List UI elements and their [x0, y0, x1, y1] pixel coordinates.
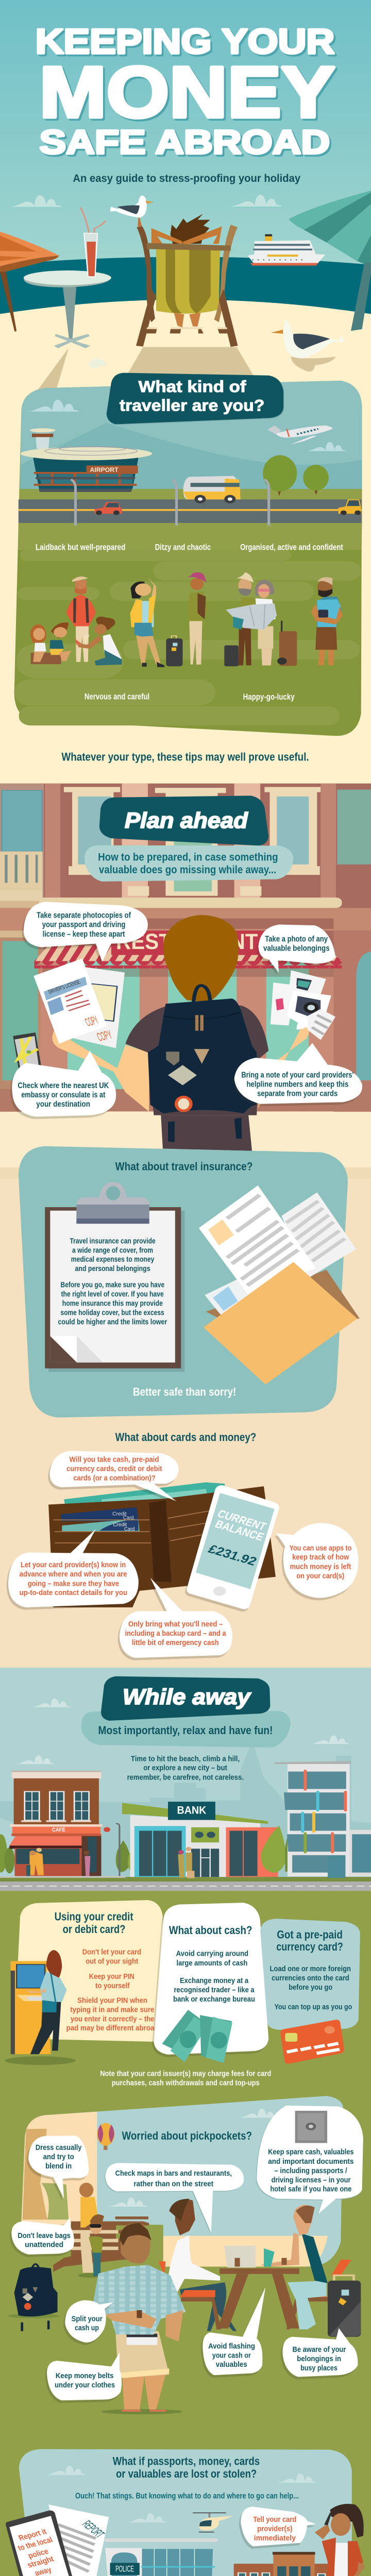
subheading bubble: Most importantly, relax and have fun! — [98, 1724, 273, 1737]
icon: driving licence copies: COPY — [83, 1013, 101, 1029]
panel: cash: Exchange money at a — [180, 1976, 248, 1985]
icon: banknotes — [162, 2010, 232, 2063]
icon: clouds — [47, 2466, 317, 2522]
scene: men at table — [159, 2199, 351, 2331]
callout: belongings: busy places — [300, 2364, 338, 2372]
icon: phone report: straight — [26, 2554, 55, 2569]
icon: phone balance: CURRENT — [215, 1507, 268, 1533]
subheading bubble: plan ahead: How to be prepared, in case something — [98, 851, 278, 863]
icon: driving licence copies: COPY — [95, 1028, 114, 1044]
callout: flashing cash: valuables — [216, 2360, 247, 2369]
heading: plan ahead: Plan ahead — [125, 808, 248, 833]
callout: card provider — [241, 2506, 316, 2546]
icon: wallet: Card — [123, 1515, 133, 1521]
title — [36, 22, 335, 161]
icon: red car — [95, 502, 122, 515]
section: traveller types — [14, 320, 362, 736]
icon: driving licence copies — [33, 958, 125, 1048]
figure: woman with sunglasses — [130, 578, 164, 667]
icon: report paper — [48, 2504, 109, 2576]
section: pickpocket callouts — [11, 2217, 358, 2400]
icon: teal parasol — [289, 191, 371, 331]
callout: only bring what you need: including a backup card – and a — [125, 1629, 226, 1637]
heading: pickpockets: Worried about pickpockets? — [122, 2129, 252, 2142]
section: hero beach scene — [0, 22, 371, 348]
clipboard text: could be higher and the limits lower — [58, 1317, 167, 1326]
icon: ATM and woman — [5, 1950, 76, 2065]
heading: plan ahead — [99, 795, 268, 845]
icon: police building: POLICE — [115, 2564, 134, 2574]
callout: cash or cards: cards (or a combination)? — [73, 1473, 156, 1482]
callout: check maps: rather than on the street — [133, 2179, 213, 2188]
panel: cash: What about cash? — [169, 1924, 252, 1937]
clipboard — [45, 1182, 184, 1372]
text: time to hit the beach: Time to hit the beach, climb a hill, — [131, 1754, 240, 1763]
icon: airport: AIRPORT — [90, 467, 119, 473]
icon: orange card — [280, 2020, 344, 2064]
icon: suitcase — [328, 2275, 361, 2337]
callout: dress casually: Dress casually — [36, 2143, 82, 2151]
heading: what kind of traveller: What kind of — [139, 378, 246, 396]
text: time to hit the beach: remember, be carefree, not careless. — [127, 1773, 244, 1782]
icon: wallet: Card — [124, 1526, 134, 1532]
clipboard text: the right level of cover. If you have — [61, 1290, 164, 1298]
section: while away — [0, 1676, 371, 1891]
panel: cash: bank or exchange bureau — [173, 1995, 255, 2003]
subheading bubble: plan ahead — [85, 845, 293, 882]
traveller type labels: Ditzy and chaotic — [155, 543, 211, 552]
lighter grass bands — [14, 550, 361, 725]
icon: helicopter — [193, 2513, 233, 2532]
icon: shell — [89, 359, 107, 369]
panel: credit or debit card: Don't let your card — [82, 1947, 141, 1956]
figure: woman with pink hat — [187, 572, 208, 665]
figure: traveller from behind — [53, 915, 310, 1151]
text: better safe: Better safe than sorry! — [133, 1385, 236, 1398]
callout: photocopies: your passport and driving — [42, 920, 125, 929]
panel: traveller — [14, 381, 362, 736]
callout: tell provider: Let your card provider(s) know in — [21, 1561, 126, 1569]
panel: insurance — [19, 1146, 348, 1417]
clipboard text — [58, 1236, 167, 1326]
callout: tell provider: going – make sure they have — [28, 1579, 119, 1588]
callout: embassy — [12, 1051, 116, 1116]
icon: driving licence copies: DRIVER'S LICENSE — [47, 978, 81, 995]
heading: while away — [101, 1676, 270, 1721]
figure: couple with map — [224, 572, 297, 666]
callout: money belts: Keep money belts — [56, 2371, 114, 2380]
section: travel insurance — [19, 1146, 360, 1417]
subheading bubble: plan ahead: valuable does go missing while away... — [99, 863, 276, 876]
icon: clouds — [11, 195, 282, 207]
callout: cash or cards: currency cards, credit or debit — [66, 1464, 162, 1473]
heading: insurance: What about travel insurance? — [115, 1160, 252, 1173]
clipboard text: some holiday cover, but the excess — [61, 1308, 164, 1317]
icon: black suitcase — [166, 636, 182, 666]
callout: hotel safe — [257, 2106, 363, 2214]
panel: credit or debit card: typing it in and make sure — [70, 2005, 154, 2014]
section: plan ahead — [0, 784, 371, 1151]
panel: credit or debit card: to yourself — [95, 1981, 130, 1990]
panel: pre-paid card — [260, 1919, 360, 2030]
icon: phone report: to the local — [16, 2535, 54, 2552]
icon: table with cocktail — [24, 207, 111, 348]
chair shadow gaps — [154, 322, 223, 343]
section: while away tips — [5, 1900, 363, 2414]
text: fees note: purchases, cash withdrawals and card top-ups — [112, 2078, 260, 2087]
sea — [0, 257, 371, 314]
icon: clouds — [28, 400, 346, 451]
icon: office tower — [275, 1761, 371, 1878]
clipboard text: medical expenses to money — [71, 1255, 154, 1264]
callout: split cash: cash up — [75, 2324, 99, 2332]
callout: dress casually: and try to — [43, 2153, 74, 2161]
subheading bubble — [81, 1711, 291, 1748]
callout: split cash: Split your — [72, 2314, 103, 2323]
figure: family — [30, 577, 122, 666]
building facade — [0, 784, 371, 1112]
panel: cash — [154, 1903, 268, 2055]
callout: money belts — [47, 2352, 122, 2400]
callout: helplines — [234, 1043, 362, 1104]
panel: pre-paid card: before you go — [289, 1983, 332, 1991]
icon: clouds — [109, 2109, 278, 2207]
callout: card provider: immediately — [254, 2534, 296, 2543]
callout: take a photo — [258, 924, 335, 972]
panel: cash: Avoid carrying around — [176, 1949, 248, 1958]
icon: man on deckchair — [136, 214, 238, 347]
callout: check maps: Check maps in bars and restaurants, — [115, 2168, 232, 2177]
panel: credit or debit card: Using your credit — [55, 1910, 133, 1923]
callout: money belts: under your clothes — [55, 2380, 115, 2389]
icon: wallet: Credit — [112, 1511, 127, 1517]
icon: phone map — [13, 1032, 43, 1078]
panel: credit or debit card: pad may be different abroad — [66, 2024, 159, 2032]
heading: cards and money: What about cards and money? — [115, 1431, 256, 1444]
icon: cafe building: CAFE — [52, 1826, 65, 1833]
icon: police building — [104, 2538, 218, 2576]
figure: man with money belt — [93, 2223, 185, 2414]
trees left — [0, 1834, 145, 1873]
heading: lost or stolen: What if passports, money, cards — [113, 2454, 260, 2468]
section: traveller figures — [30, 543, 343, 763]
icon: phone balance — [187, 1485, 279, 1609]
callout: flashing cash: your cash or — [212, 2351, 251, 2360]
ground and road — [0, 1876, 371, 1891]
traveller type labels: Laidback but well-prepared — [36, 543, 125, 552]
icon: report paper: REPORT — [79, 2518, 107, 2539]
callout: photocopies — [24, 902, 148, 962]
callout: bags: unattended — [25, 2240, 63, 2249]
callout: photocopies: license – keep these apart — [43, 929, 125, 939]
icon: airport — [21, 428, 152, 492]
text: time to hit the beach: or explore a new city – but — [143, 1764, 227, 1772]
heading: lost or stolen — [113, 2454, 260, 2480]
callout: only bring what you need: little bit of emergency cash — [132, 1638, 219, 1647]
text: time to hit the beach — [127, 1754, 244, 1782]
icon: clouds — [16, 1699, 350, 1764]
callout: tell provider: advance where and when you are — [20, 1570, 127, 1578]
icon: phone balance: £231.92 — [206, 1542, 259, 1568]
callout: bags: Don't leave bags — [18, 2231, 71, 2240]
callout: embassy: embassy or consulate is at — [21, 1090, 105, 1099]
restaurant sign and awning: RESTAURANT — [116, 929, 258, 954]
title: SAFE ABROAD — [40, 124, 330, 161]
heading: while away: While away — [123, 1684, 252, 1709]
panel: credit or debit card: Shield your PIN when — [77, 1996, 147, 2005]
figures at cafe — [26, 1848, 90, 1876]
text: fees note: Note that your card issuer(s) may charge fees for card — [100, 2069, 271, 2078]
icon: embassy — [225, 2552, 329, 2576]
traveller type labels: Happy-go-lucky — [243, 692, 295, 702]
icon: bank — [122, 1802, 278, 1878]
panel: credit or debit card: or debit card? — [63, 1923, 125, 1936]
callout: cash or cards — [49, 1451, 179, 1501]
panel: lost or stolen — [19, 2449, 352, 2576]
icon: trees — [95, 2576, 234, 2577]
icon: wallet — [48, 1482, 276, 1607]
callout: take a photo: Take a photo of any — [265, 934, 328, 943]
text: fees note — [100, 2069, 271, 2087]
icon: plane — [267, 426, 332, 445]
icon: phone report: police — [26, 2547, 50, 2560]
callout: split cash — [65, 2300, 113, 2343]
restaurant sign and awning — [35, 929, 342, 969]
callout: card provider: Tell your card — [253, 2515, 296, 2523]
panel: credit or debit card — [14, 1900, 165, 2042]
icon: yellow car — [339, 499, 361, 515]
icon: bank: BANK — [177, 1804, 206, 1816]
clipboard text: and personal belongings — [75, 1264, 150, 1273]
icon: documents folder — [199, 1185, 360, 1384]
callout: belongings: belongings in — [297, 2354, 341, 2363]
icon: bus — [183, 476, 241, 503]
panel: pickpockets background — [21, 2096, 343, 2267]
scene: woman, boy and bench — [53, 2183, 149, 2278]
callout: photocopies: Take separate photocopies of — [37, 910, 131, 920]
callout: flashing cash: Avoid flashing — [208, 2342, 255, 2350]
callout: tell provider: up-to-date contact details for you — [20, 1588, 127, 1597]
panel: cash: large amounts of cash — [177, 1958, 247, 1967]
heading: lost or stolen: or valuables are lost or stolen? — [116, 2467, 257, 2480]
callout: bags — [11, 2217, 74, 2255]
skyline — [0, 1747, 371, 1877]
heading: what kind of traveller — [107, 373, 283, 424]
street lamps — [71, 480, 269, 526]
clipboard text: a wide range of cover, from — [72, 1246, 153, 1255]
clipboard text: Travel insurance can provide — [70, 1236, 156, 1245]
callout: only bring what you need — [120, 1578, 232, 1658]
panel: credit or debit card: Keep your PIN — [89, 1972, 134, 1981]
callout: tell provider — [8, 1529, 139, 1607]
beach shadows — [38, 347, 254, 389]
callout: cash or cards: Will you take cash, pre-paid — [70, 1455, 159, 1464]
icon: cafe building — [9, 1771, 120, 1876]
callout: dress casually — [28, 2136, 89, 2199]
callout: belongings — [282, 2328, 358, 2377]
icon: phone report — [6, 2511, 76, 2576]
icon: phone balance: BALANCE — [213, 1518, 266, 1544]
icon: cruise ship — [248, 234, 325, 265]
figure: worried woman on phone — [292, 2504, 365, 2576]
clipboard text: Before you go, make sure you have — [61, 1280, 164, 1289]
heading: what kind of traveller: traveller are you? — [120, 396, 264, 414]
traveller type labels: Nervous and careful — [85, 692, 149, 702]
icon: seagull on sand — [271, 320, 345, 371]
section: lost or stolen — [6, 2449, 365, 2576]
callout: only bring what you need: Only bring what you'll need – — [128, 1620, 223, 1628]
panel: credit or debit card: out of your sight — [86, 1957, 138, 1965]
callout: dress casually: blend in — [45, 2161, 72, 2170]
callout: take a photo: valuable belongings — [263, 943, 330, 953]
callout: card provider: provider(s) — [257, 2524, 293, 2533]
clipboard text: home insurance this may provide — [62, 1299, 163, 1308]
panel: credit or debit card: you enter it correctly – the — [71, 2014, 154, 2023]
icon: hot air balloon — [97, 2123, 114, 2150]
panel: cash: recognised trader – like a — [174, 1986, 255, 1994]
callout: apps: on your card(s) — [296, 1571, 344, 1580]
icon: phone report: Report it — [17, 2527, 48, 2543]
icon: seagull on chair — [110, 195, 154, 227]
callout: check maps — [105, 2163, 244, 2233]
callout: embassy: Check where the nearest UK — [18, 1081, 109, 1090]
icon: wallet: Credit — [113, 1521, 127, 1528]
trees right of bank — [261, 1825, 293, 1873]
icon: photos of belongings — [271, 970, 335, 1040]
callout: flashing cash — [203, 2287, 265, 2375]
callout: embassy: your destination — [36, 1099, 90, 1108]
icon: orange parasol — [0, 232, 59, 332]
icon: trees — [263, 455, 329, 496]
callout: apps — [276, 1523, 358, 1598]
figure: man with camera — [311, 577, 343, 666]
traveller type labels — [36, 543, 343, 702]
section: cards and money — [8, 1385, 358, 1658]
icon: backpack small — [8, 2264, 60, 2331]
